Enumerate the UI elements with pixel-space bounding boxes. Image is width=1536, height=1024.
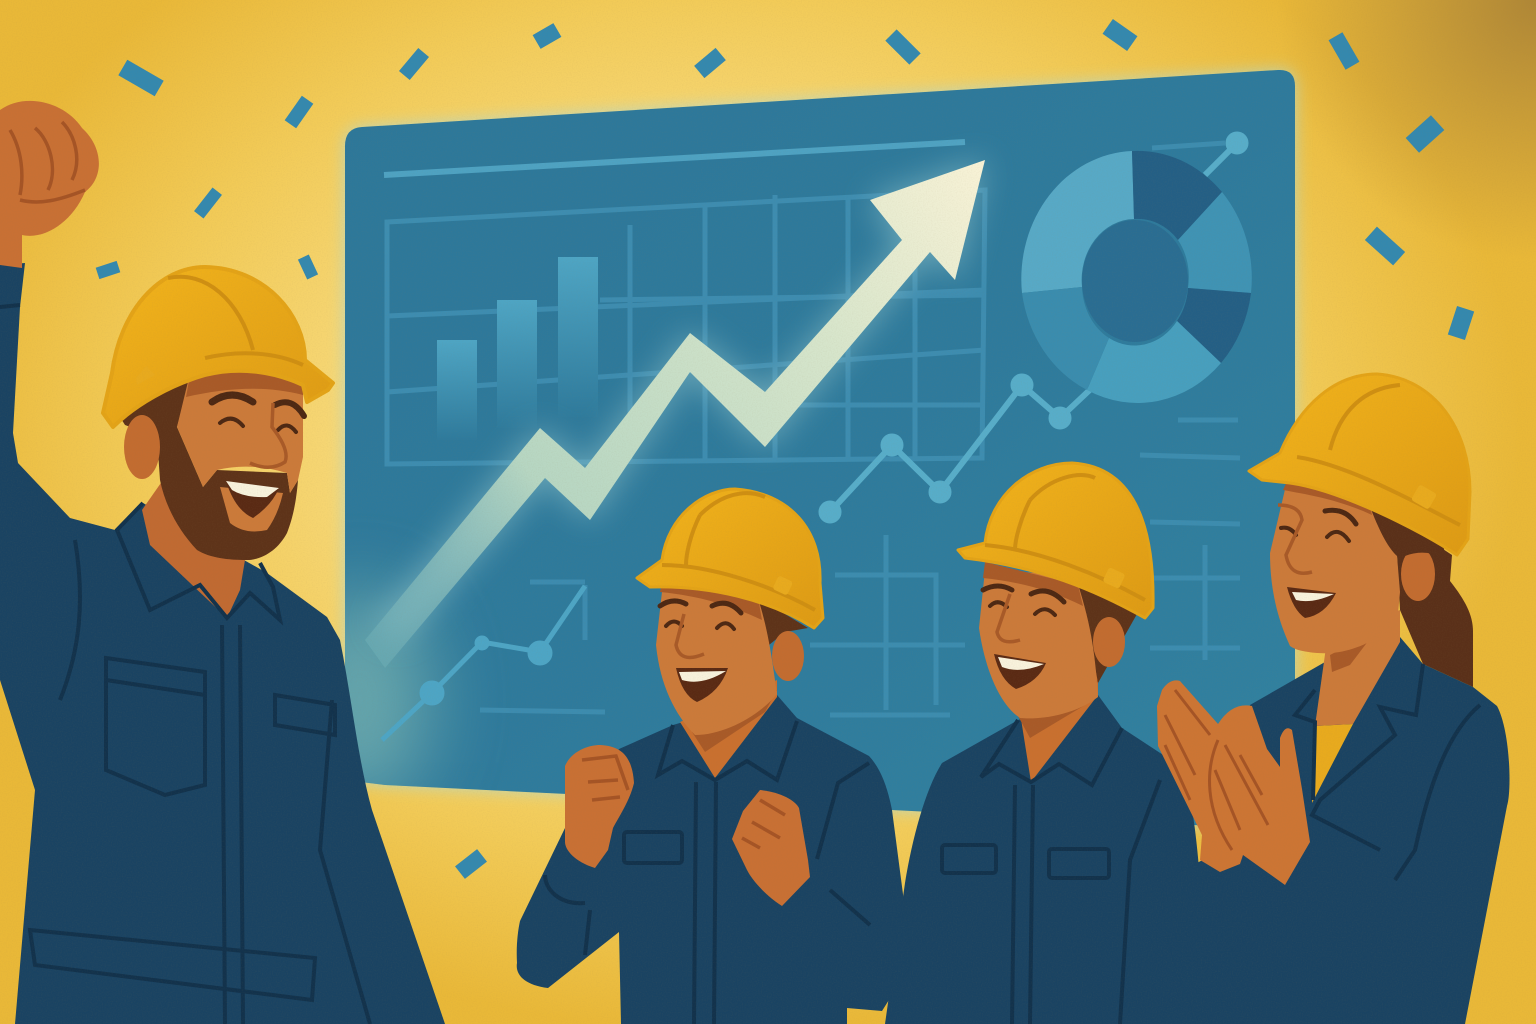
glow behind growth arrow [375, 160, 985, 640]
ear [1401, 547, 1435, 601]
left fist [565, 745, 634, 868]
face details [1281, 510, 1356, 541]
hair [752, 594, 808, 645]
ear [1093, 617, 1125, 667]
face details [983, 586, 1064, 615]
chin patch [220, 487, 283, 531]
forehead shadow [186, 365, 305, 397]
lapels [1295, 664, 1480, 880]
raised arm and coverall [0, 263, 445, 1024]
confetti [96, 19, 1474, 879]
mouth [994, 654, 1046, 689]
nose [1278, 505, 1312, 573]
hair [1072, 578, 1137, 683]
face details [660, 601, 741, 629]
title bar line [384, 142, 965, 175]
helmet [637, 489, 823, 628]
coverall [885, 695, 1205, 1024]
raised fist [0, 101, 99, 268]
clapping hands [1157, 680, 1310, 885]
helmet [1249, 374, 1470, 555]
collar and seams [0, 305, 370, 1024]
hair and beard [120, 375, 298, 560]
worker 4: woman clapping, right [1157, 374, 1510, 1024]
collar and seams [545, 721, 870, 1024]
table grid [387, 190, 985, 464]
head [656, 583, 777, 735]
neck [142, 470, 245, 618]
mouth [1287, 587, 1336, 618]
nose [997, 594, 1020, 642]
nose [676, 614, 704, 657]
face skin [177, 365, 303, 493]
forehead shadow [1283, 475, 1372, 515]
line chart with markers [819, 132, 1248, 523]
bar chart [437, 257, 598, 440]
neck [1315, 610, 1400, 726]
helmet vent [772, 575, 793, 596]
worker 2: man with clenched fists, centre [517, 489, 912, 1024]
blazer [1163, 637, 1510, 1024]
mouth [226, 481, 279, 518]
ear [124, 415, 160, 479]
forehead shadow [660, 578, 762, 620]
worker 1: bearded man raising fist, left [0, 101, 445, 1024]
shirt [1312, 724, 1353, 803]
growth arrow [365, 160, 985, 668]
helmet vent [136, 366, 155, 385]
nose [250, 403, 286, 467]
finger creases [582, 756, 785, 848]
hair over temple [1367, 499, 1450, 570]
lower-left board glow [345, 564, 464, 788]
finger creases [1165, 690, 1268, 850]
helmet vent [1102, 567, 1126, 589]
head [1270, 481, 1400, 653]
neck [1018, 670, 1098, 782]
coverall [517, 695, 912, 1024]
worker 3: man laughing, second from right [885, 463, 1205, 1024]
forehead shadow [983, 562, 1083, 606]
helmet vent [1411, 484, 1437, 510]
face details [212, 395, 304, 432]
helmet [958, 463, 1153, 618]
panel: dashboard board [290, 70, 1295, 830]
right fist [732, 790, 810, 906]
collar and seams [942, 720, 1160, 1024]
ponytail [1367, 499, 1473, 687]
small line chart, lower left [382, 586, 585, 740]
ear [772, 631, 804, 681]
helmet [103, 267, 333, 427]
donut chart [1021, 151, 1252, 403]
mouth [676, 668, 728, 702]
head [979, 570, 1098, 718]
secondary grid, lower right [480, 143, 1240, 715]
neck [680, 680, 777, 778]
